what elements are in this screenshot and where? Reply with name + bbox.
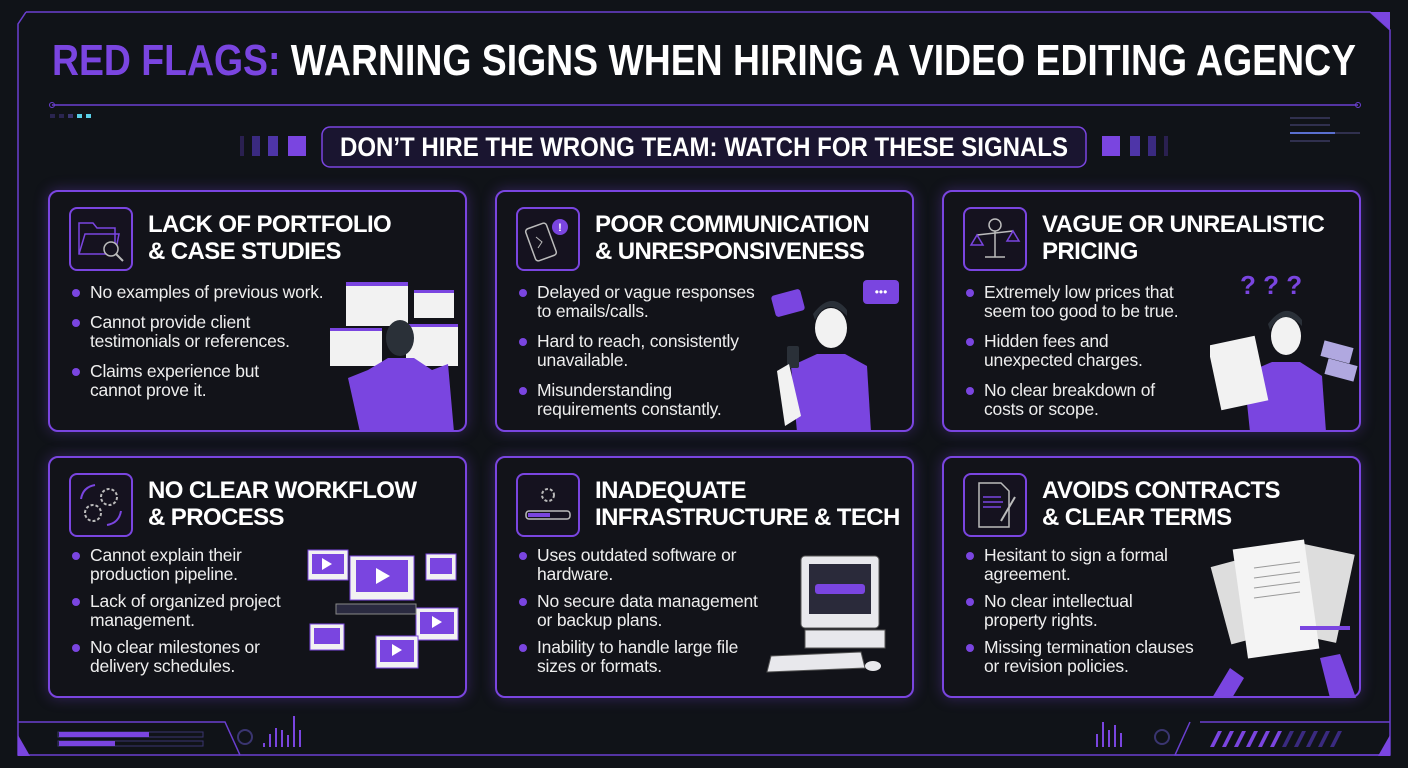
illustration: confused person with bill: ? ? ? — [1240, 270, 1302, 300]
bullets: Lack of organized project — [90, 591, 281, 611]
heading: PRICING — [1042, 238, 1138, 265]
bullets: sizes or formats. — [537, 656, 662, 676]
bullets — [966, 282, 1178, 419]
heading — [1042, 477, 1280, 531]
bullets: or revision policies. — [984, 656, 1129, 676]
bullets: Hesitant to sign a formal — [984, 545, 1168, 565]
icon: document signature — [963, 473, 1027, 537]
subtitle banner — [240, 126, 1168, 168]
illustration: person with windows — [330, 282, 458, 430]
icon: progress gear — [516, 473, 580, 537]
illustration: confused person with bill — [1210, 270, 1358, 430]
bullets: No clear breakdown of — [984, 380, 1155, 400]
panel: communication — [495, 190, 914, 432]
bullets: property rights. — [984, 610, 1098, 630]
bullets: No secure data management — [537, 591, 758, 611]
panel: workflow — [48, 456, 467, 698]
heading: POOR COMMUNICATION — [595, 211, 869, 238]
heading — [595, 211, 869, 265]
heading: AVOIDS CONTRACTS — [1042, 477, 1280, 504]
heading: INFRASTRUCTURE & TECH — [595, 504, 900, 531]
bullets: Misunderstanding — [537, 380, 672, 400]
bullets: Inability to handle large file — [537, 637, 738, 657]
bullets: requirements constantly. — [537, 399, 722, 419]
bullets: Missing termination clauses — [984, 637, 1194, 657]
bullets: No clear intellectual — [984, 591, 1133, 611]
icon: folder search — [69, 207, 133, 271]
heading: & CASE STUDIES — [148, 238, 341, 265]
bullets: production pipeline. — [90, 564, 238, 584]
illustration: video pipeline — [308, 550, 458, 668]
heading: & PROCESS — [148, 504, 284, 531]
bullets: cannot prove it. — [90, 380, 206, 400]
illustration: frustrated person: ••• — [875, 285, 887, 299]
bullets: Cannot explain their — [90, 545, 242, 565]
bullets: Hidden fees and — [984, 331, 1108, 351]
bullets: No examples of previous work. — [90, 282, 323, 302]
bullets: Hard to reach, consistently — [537, 331, 739, 351]
bullets: Uses outdated software or — [537, 545, 736, 565]
icon: gears — [69, 473, 133, 537]
icon: broken phone: ! — [558, 222, 562, 234]
bullets — [72, 545, 281, 676]
bullets: costs or scope. — [984, 399, 1099, 419]
icon: scale — [963, 207, 1027, 271]
bullets: Cannot provide client — [90, 312, 250, 332]
heading: LACK OF PORTFOLIO — [148, 211, 391, 238]
bullets: management. — [90, 610, 195, 630]
panel: pricing — [942, 190, 1361, 432]
icon: broken phone — [516, 207, 580, 271]
bullets — [966, 545, 1194, 676]
bullets: Delayed or vague responses — [537, 282, 755, 302]
bullets: No clear milestones or — [90, 637, 260, 657]
bullets — [519, 545, 758, 676]
bullets — [519, 282, 755, 419]
heading: & CLEAR TERMS — [1042, 504, 1232, 531]
panel: contracts — [942, 456, 1361, 698]
heading: & UNRESPONSIVENESS — [595, 238, 864, 265]
heading — [148, 211, 391, 265]
bullets: or backup plans. — [537, 610, 662, 630]
heading: NO CLEAR WORKFLOW — [148, 477, 416, 504]
heading — [148, 477, 417, 531]
panel: infrastructure — [495, 456, 914, 698]
bullets — [72, 282, 323, 400]
bullets: agreement. — [984, 564, 1071, 584]
heading — [1042, 211, 1324, 265]
heading: INADEQUATE — [595, 477, 746, 504]
bullets: unexpected charges. — [984, 350, 1143, 370]
bullets: unavailable. — [537, 350, 628, 370]
illustration: old computer — [766, 556, 886, 672]
bullets: to emails/calls. — [537, 301, 649, 321]
panel: portfolio — [48, 190, 467, 432]
bullets: testimonials or references. — [90, 331, 290, 351]
bullets: Claims experience but — [90, 361, 259, 381]
bullets: hardware. — [537, 564, 613, 584]
heading: VAGUE OR UNREALISTIC — [1042, 211, 1324, 238]
illustration: signing papers — [1210, 540, 1356, 698]
bullets: seem too good to be true. — [984, 301, 1178, 321]
heading — [595, 477, 900, 531]
illustration: frustrated person — [771, 280, 899, 430]
bullets: delivery schedules. — [90, 656, 235, 676]
bullets: Extremely low prices that — [984, 282, 1174, 302]
subtitle banner: DON’T HIRE THE WRONG TEAM: WATCH FOR THESE SIGNALS — [340, 132, 1068, 162]
